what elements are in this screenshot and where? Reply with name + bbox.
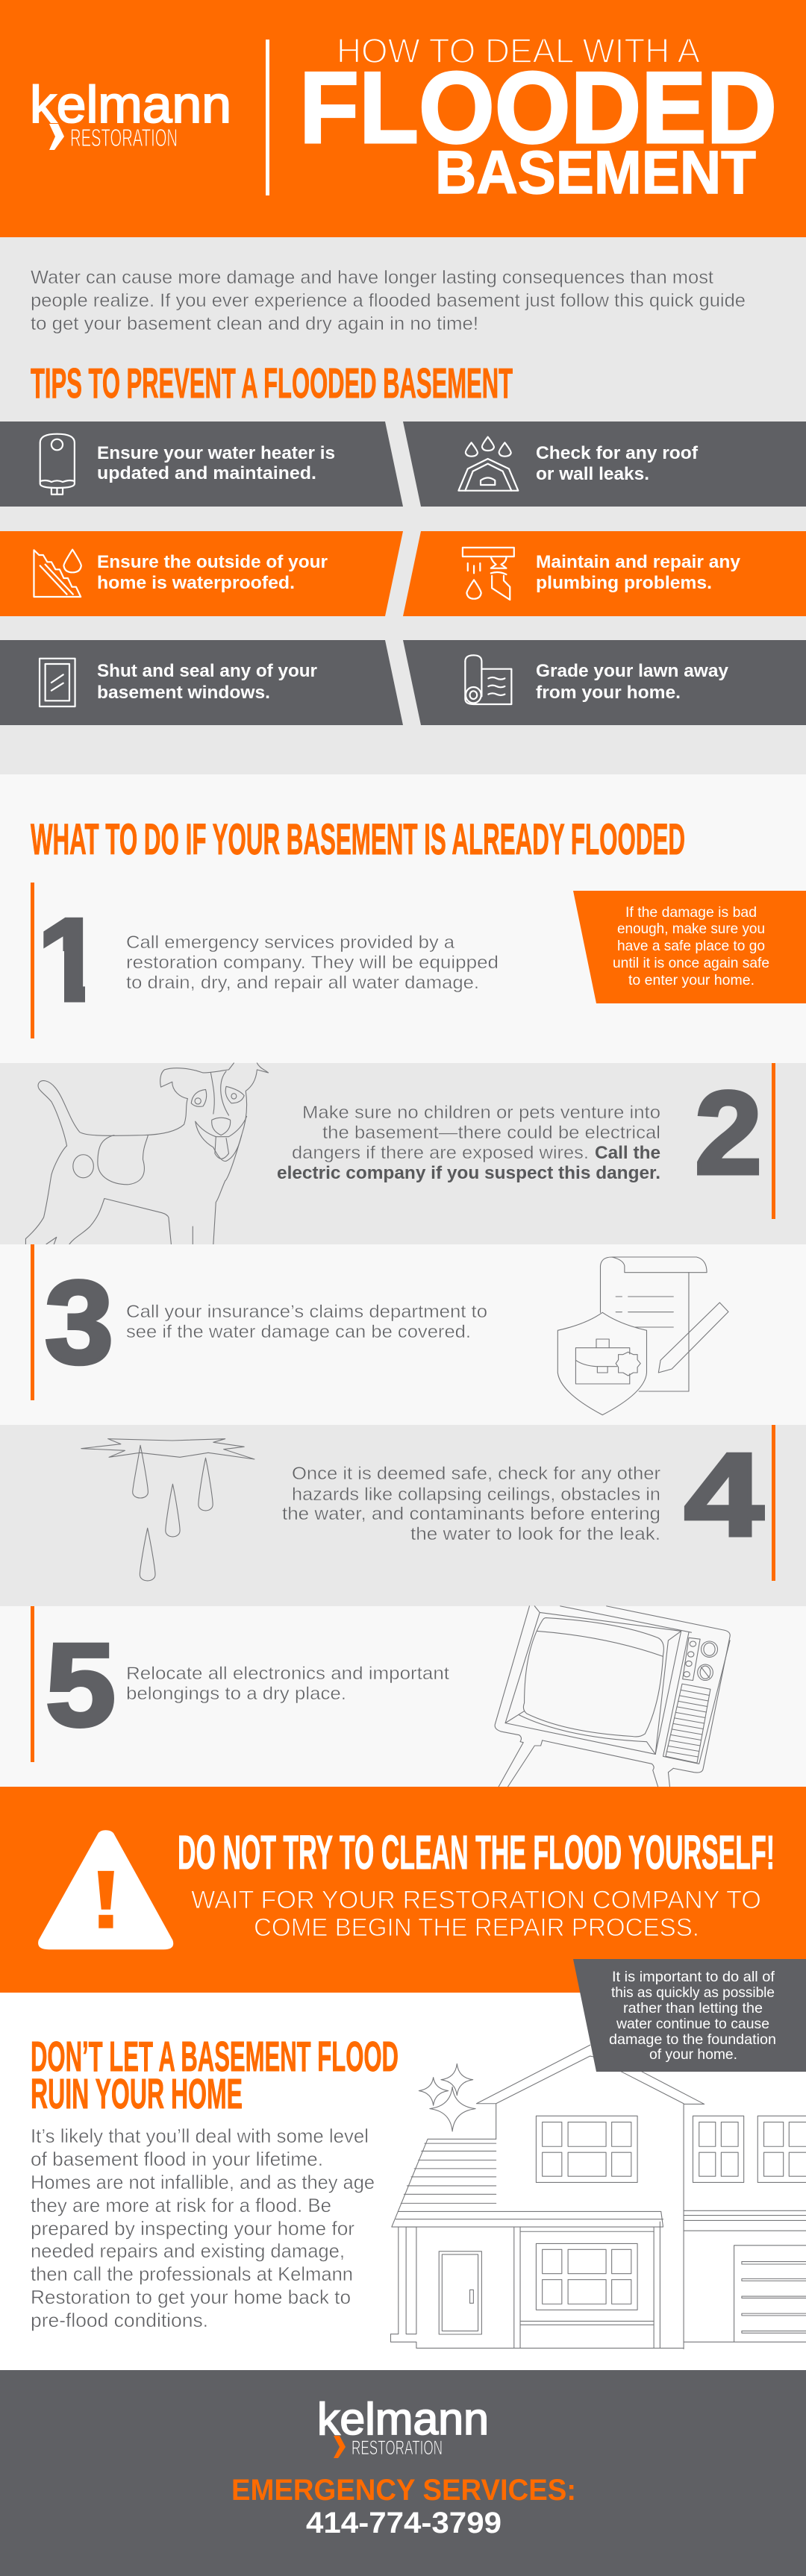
tip: roof leaks: Check for any roof	[536, 443, 699, 463]
number 5: 5	[46, 1620, 116, 1751]
title: BASEMENT	[435, 139, 756, 207]
step 5 text: Relocate all electronics and important	[126, 1664, 449, 1684]
banner subtext	[191, 1886, 761, 1942]
paragraph: pre-flood conditions.	[31, 2309, 208, 2331]
tip: lawn grade: from your home.	[536, 683, 681, 703]
paragraph: needed repairs and existing damage,	[31, 2240, 345, 2262]
tip: plumbing: Maintain and repair any	[536, 552, 741, 572]
tip: water heater	[0, 422, 403, 507]
callout: safe place: If the damage is bad	[625, 904, 757, 921]
tip: water heater: Ensure your water heater is	[97, 443, 335, 463]
icon: broken pipe	[463, 548, 514, 600]
step 5 text	[126, 1664, 449, 1704]
paragraph: Restoration to get your home back to	[31, 2286, 351, 2308]
panel: tips section	[0, 237, 806, 774]
tip: waterproofing: Ensure the outside of your	[97, 552, 328, 572]
footer logo: RESTORATION	[352, 2436, 443, 2459]
illustration: ceiling crack and drips	[81, 1439, 254, 1581]
callout: act quickly: damage to the foundation	[609, 2031, 776, 2048]
step 5 text: belongings to a dry place.	[126, 1684, 346, 1704]
intro text: to get your basement clean and dry again in no time!	[31, 313, 478, 334]
number 4: 4	[684, 1429, 763, 1561]
logo: Kelmann Restoration: kelmann	[30, 75, 231, 134]
number 1: 1	[37, 894, 103, 1026]
step 2 text: the basement—there could be electrical	[322, 1123, 660, 1143]
phone number: 414-774-3799	[306, 2507, 502, 2539]
tip: plumbing: plumbing problems.	[536, 573, 712, 593]
tip: roof leaks: or wall leaks.	[536, 464, 649, 484]
callout: act quickly: water continue to cause	[616, 2016, 769, 2032]
paragraph: they are more at risk for a flood. Be	[31, 2194, 331, 2216]
step 1 text: to drain, dry, and repair all water damage.	[126, 973, 479, 993]
step 2 text: electric company if you suspect this danger.	[277, 1163, 660, 1183]
icon: warning triangle	[38, 1830, 173, 1949]
callout: safe place	[573, 891, 806, 1003]
panel: step 1	[30, 824, 806, 1038]
icon: window	[40, 659, 75, 706]
step 1 text	[126, 933, 499, 993]
tip: lawn grade	[403, 640, 806, 725]
callout: safe place: have a safe place to go	[617, 938, 765, 954]
icon: lawn roll	[465, 655, 511, 704]
callout: act quickly: It is important to do all of	[612, 1969, 775, 1985]
callout: act quickly: of your home.	[649, 2046, 737, 2063]
paragraph: Homes are not infallible, and as they age	[31, 2171, 375, 2193]
banner subtext: WAIT FOR YOUR RESTORATION COMPANY TO	[191, 1886, 761, 1914]
tip: plumbing	[403, 531, 806, 616]
step 2 text: Make sure no children or pets venture into	[302, 1103, 660, 1123]
step 2 text: dangers if there are exposed wires.	[292, 1143, 589, 1163]
footer logo: kelmann	[317, 2394, 489, 2444]
illustration: dog	[25, 1063, 269, 1244]
tip: waterproofing: home is waterproofed.	[97, 573, 295, 593]
step 3 text: see if the water damage can be covered.	[126, 1322, 471, 1342]
tip: windows	[0, 640, 403, 725]
icon: leaking building	[458, 437, 518, 491]
illustration: house	[390, 2045, 806, 2349]
logo: Kelmann Restoration: RESTORATION	[70, 124, 178, 151]
step 3 text	[126, 1302, 487, 1342]
illustration: insurance shield and document	[557, 1257, 728, 1415]
intro text	[31, 267, 746, 334]
callout: safe place: enough, make sure you	[617, 921, 765, 937]
callout: act quickly: rather than letting the	[623, 2000, 763, 2016]
step 4 text: Once it is deemed safe, check for any other	[292, 1464, 660, 1484]
panel: warning banner	[0, 1787, 806, 1993]
tip: windows: Shut and seal any of your	[97, 661, 317, 681]
banner subtext: COME BEGIN THE REPAIR PROCESS.	[254, 1914, 699, 1942]
panel: don't let a flood ruin your home	[0, 1993, 806, 2370]
panel: step 2	[0, 1063, 806, 1244]
step 4 text: the water, and contaminants before entering	[282, 1504, 660, 1524]
step 4 text: hazards like collapsing ceilings, obstacles in	[292, 1485, 660, 1505]
tip: waterproofing	[0, 531, 403, 616]
footer	[0, 2370, 806, 2576]
intro text: Water can cause more damage and have longer lasting consequences than most	[31, 267, 713, 288]
callout: safe place: until it is once again safe	[613, 955, 769, 971]
tip: lawn grade: Grade your lawn away	[536, 661, 729, 681]
title: FLOODED	[299, 51, 777, 164]
paragraph: of basement flood in your lifetime.	[31, 2148, 323, 2170]
tip: windows: basement windows.	[97, 683, 270, 703]
panel: step 4	[0, 1425, 806, 1606]
callout: act quickly	[573, 1959, 806, 2072]
heading: ruin your home	[31, 2033, 399, 2118]
callout: safe place: to enter your home.	[628, 972, 755, 988]
step 1 text: restoration company. They will be equipped	[126, 953, 499, 973]
paragraph: It’s likely that you’ll deal with some level	[31, 2125, 369, 2147]
step 3 text: Call your insurance’s claims department to	[126, 1302, 487, 1322]
tip: water heater: updated and maintained.	[97, 463, 316, 483]
heading: ruin your home: DON’T LET A BASEMENT FLOOD	[31, 2033, 399, 2081]
number 2: 2	[695, 1068, 762, 1199]
title: HOW TO DEAL WITH A	[337, 31, 700, 70]
step 2 text: Call the	[595, 1143, 660, 1163]
title	[299, 31, 777, 207]
heading: ruin your home: RUIN YOUR HOME	[31, 2070, 243, 2118]
header band	[0, 0, 806, 237]
intro text: people realize. If you ever experience a flooded basement just follow this quick guide	[31, 290, 746, 311]
paragraph: then call the professionals at Kelmann	[31, 2263, 353, 2285]
callout: act quickly: this as quickly as possible	[611, 1984, 775, 2001]
panel: step 3	[0, 1244, 806, 1425]
emergency services label: EMERGENCY SERVICES:	[231, 2474, 576, 2507]
illustration: television	[495, 1606, 730, 1787]
step 2 text	[277, 1103, 660, 1183]
icon: waterproof wall	[34, 550, 81, 597]
tip: roof leaks	[403, 422, 806, 507]
number 3: 3	[45, 1257, 113, 1388]
step 4 text	[282, 1464, 660, 1544]
step 4 text: the water to look for the leak.	[410, 1524, 660, 1544]
paragraph	[31, 2125, 375, 2331]
panel: step 5	[0, 1606, 806, 1787]
icon: water heater	[40, 434, 75, 495]
paragraph: prepared by inspecting your home for	[31, 2217, 354, 2240]
step 1 text: Call emergency services provided by a	[126, 933, 455, 953]
